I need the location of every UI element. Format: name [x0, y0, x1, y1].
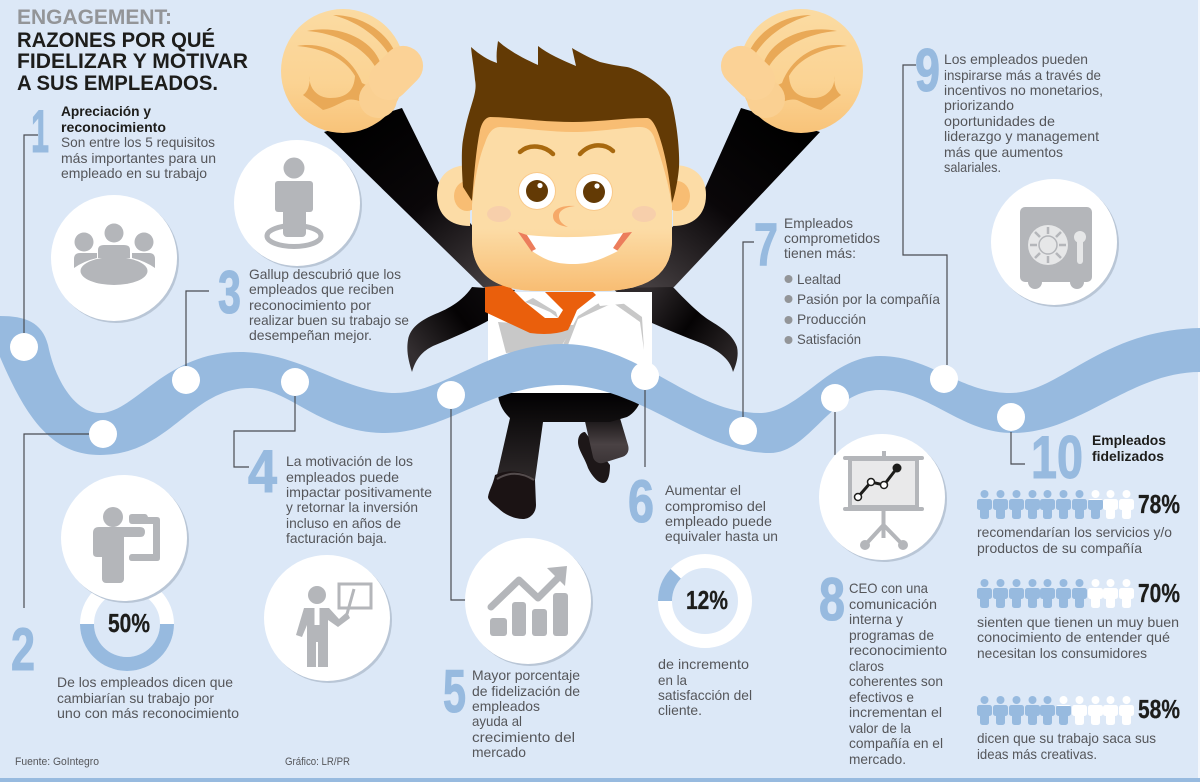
text 78% — [977, 524, 1172, 556]
text 5: crecimiento del — [472, 729, 575, 745]
text 9: más que aumentos — [944, 144, 1063, 160]
text 3: realizar buen su trabajo se — [249, 312, 409, 328]
nose — [553, 206, 575, 227]
text 8: incrementan el — [849, 704, 942, 720]
text 8: coherentes son — [849, 673, 943, 689]
text 9 — [944, 51, 1103, 175]
text 6: compromiso del — [665, 498, 766, 514]
icon: presentation board — [819, 434, 947, 562]
pictogram 70% — [977, 578, 1180, 608]
text 70%: necesitan los consumidores — [977, 645, 1147, 661]
text 8 — [849, 580, 947, 767]
text 2: De los empleados dicen que — [57, 674, 233, 690]
text 6b: en la — [658, 672, 687, 688]
ears — [437, 165, 706, 226]
text 6: Aumentar el — [665, 482, 741, 498]
icon: presenter with board — [264, 555, 392, 683]
title: RAZONES POR QUÉ — [17, 29, 215, 52]
pictogram 58%: 58% — [1138, 694, 1180, 724]
text 58%: ideas más creativas. — [977, 746, 1097, 762]
text 6: equivaler hasta un — [665, 528, 778, 544]
item 3 — [218, 140, 409, 343]
text 4: facturación baja. — [286, 530, 387, 546]
character: businessman jumping — [281, 9, 863, 519]
text 70% — [977, 614, 1179, 661]
text 5: de fidelización de — [472, 683, 580, 699]
pictogram 78%: 78% — [1138, 489, 1180, 519]
leader lines — [24, 65, 1025, 608]
text 70%: conocimiento de entender qué — [977, 629, 1170, 645]
eyes — [518, 172, 613, 211]
right arm — [630, 108, 820, 300]
text 6b: satisfacción del — [658, 687, 752, 703]
text 4: impactar positivamente — [286, 484, 432, 500]
text 5: mercado — [472, 744, 526, 760]
smile — [518, 232, 632, 264]
donut 50% — [80, 584, 174, 671]
text 7: comprometidos — [784, 230, 880, 246]
text 5 — [472, 667, 580, 760]
donut 50%: 50% — [108, 608, 150, 638]
heading 10: Empleados — [1092, 432, 1166, 448]
text 9: liderazgo y management — [944, 128, 1099, 144]
item 5 — [443, 538, 593, 760]
text 3: Gallup descubrió que los — [249, 266, 401, 282]
text 1: Apreciación y — [61, 103, 151, 119]
item 7 — [754, 211, 940, 347]
item 2 — [11, 475, 239, 721]
icon: person with folder — [61, 475, 189, 603]
donut 12%: 12% — [686, 585, 728, 615]
text 3: desempeñan mejor. — [249, 327, 372, 343]
text 78%: recomendarían los servicios y/o — [977, 524, 1172, 540]
text 6 — [665, 482, 778, 544]
text 7: Empleados — [784, 215, 853, 231]
source credit: Fuente: GoIntegro — [15, 756, 99, 768]
text 4: incluso en años de — [286, 515, 401, 531]
text 8: programas de — [849, 627, 934, 643]
text 6b: cliente. — [658, 702, 702, 718]
title — [17, 6, 248, 95]
text 8: claros — [849, 658, 884, 674]
text 9: inspirarse más a través de — [944, 67, 1101, 83]
number 3: 3 — [218, 259, 241, 326]
number 10: 10 — [1031, 424, 1083, 491]
item 10 — [977, 424, 1180, 762]
text 8: mercado. — [849, 751, 906, 767]
text 9: incentivos no monetarios, — [944, 82, 1103, 98]
text 8: comunicación — [849, 596, 937, 612]
text 58% — [977, 730, 1156, 762]
text 1: reconocimiento — [61, 119, 166, 135]
bullet list — [784, 271, 940, 347]
text 4: y retornar la inversión — [286, 499, 418, 515]
text 4: empleados puede — [286, 469, 399, 485]
text 2: uno con más reconocimiento — [57, 705, 239, 721]
graphic credit: Gráfico: LR/PR — [285, 756, 350, 768]
text 6b — [658, 656, 752, 718]
number 2: 2 — [11, 616, 35, 683]
icon: person on target — [234, 140, 362, 268]
text 6b: de incremento — [658, 656, 749, 672]
text 9: Los empleados pueden — [944, 51, 1088, 67]
donut 12% — [658, 561, 745, 641]
item 4 — [248, 438, 432, 683]
bullet list: Pasión por la compañía — [797, 291, 940, 307]
text 3 — [249, 266, 409, 343]
text 1: más importantes para un — [61, 150, 216, 166]
text 8: efectivos e — [849, 689, 914, 705]
ribbon: wavy path — [0, 316, 1200, 455]
text 70%: sienten que tienen un muy buen — [977, 614, 1179, 630]
icon: meeting table — [51, 195, 179, 323]
hair — [462, 41, 679, 203]
cheeks — [487, 206, 656, 222]
text 6: empleado puede — [665, 513, 772, 529]
heading 10 — [1092, 432, 1166, 464]
number 4: 4 — [248, 438, 278, 505]
text 8: reconocimiento — [849, 642, 947, 658]
title: A SUS EMPLEADOS. — [17, 72, 218, 95]
eyebrows — [520, 145, 613, 154]
number 1: 1 — [31, 98, 49, 165]
ribbon nodes — [10, 333, 1025, 448]
text 2 — [57, 674, 239, 721]
number 7: 7 — [754, 211, 778, 278]
icon: growth chart — [465, 538, 593, 666]
legs — [488, 393, 642, 519]
title: FIDELIZAR Y MOTIVAR — [17, 50, 248, 73]
text 1: empleado en su trabajo — [61, 165, 207, 181]
text 3: reconocimiento por — [249, 297, 371, 313]
bullet list: Lealtad — [797, 271, 841, 287]
text 9: priorizando — [944, 97, 1014, 113]
text 58%: dicen que su trabajo saca sus — [977, 730, 1156, 746]
text 4: La motivación de los — [286, 453, 413, 469]
item 1 — [31, 98, 216, 323]
item 8 — [819, 434, 947, 767]
item 6 — [628, 468, 778, 718]
pictogram 58% — [977, 694, 1180, 725]
left fist — [281, 9, 431, 133]
text 5: Mayor porcentaje — [472, 667, 580, 683]
text 78%: productos de su compañía — [977, 540, 1142, 556]
pictogram 70%: 70% — [1138, 578, 1180, 608]
text 2: cambiarían su trabajo por — [57, 690, 214, 706]
shirt and tie — [485, 285, 652, 393]
left arm — [324, 108, 512, 300]
face — [472, 117, 672, 291]
item 9 — [915, 37, 1119, 307]
text 4 — [286, 453, 432, 546]
text 7: tienen más: — [784, 245, 856, 261]
bullet list: Satisfación — [797, 331, 861, 347]
text 1: Son entre los 5 requisitos — [61, 134, 215, 150]
text 9: salariales. — [944, 159, 1001, 175]
text 8: valor de la — [849, 720, 911, 736]
heading 10: fidelizados — [1092, 448, 1164, 464]
number 9: 9 — [915, 37, 940, 104]
text 8: compañía en el — [849, 735, 943, 751]
text 7 — [784, 215, 880, 261]
bullet list: Producción — [797, 311, 866, 327]
bottom bar — [0, 778, 1200, 782]
text 1 — [61, 103, 216, 181]
right fist — [713, 9, 863, 133]
number 6: 6 — [628, 468, 654, 535]
text 8: interna y — [849, 611, 903, 627]
text 9: oportunidades de — [944, 113, 1055, 129]
title: ENGAGEMENT: — [17, 6, 172, 29]
text 5: ayuda al — [472, 713, 522, 729]
text 3: empleados que reciben — [249, 281, 394, 297]
number 8: 8 — [819, 566, 845, 633]
pictogram 78% — [977, 489, 1180, 519]
number 5: 5 — [443, 658, 466, 725]
text 8: CEO con una — [849, 580, 928, 596]
jacket tails — [407, 287, 738, 372]
text 5: empleados — [472, 698, 540, 714]
icon: safe — [991, 179, 1119, 307]
